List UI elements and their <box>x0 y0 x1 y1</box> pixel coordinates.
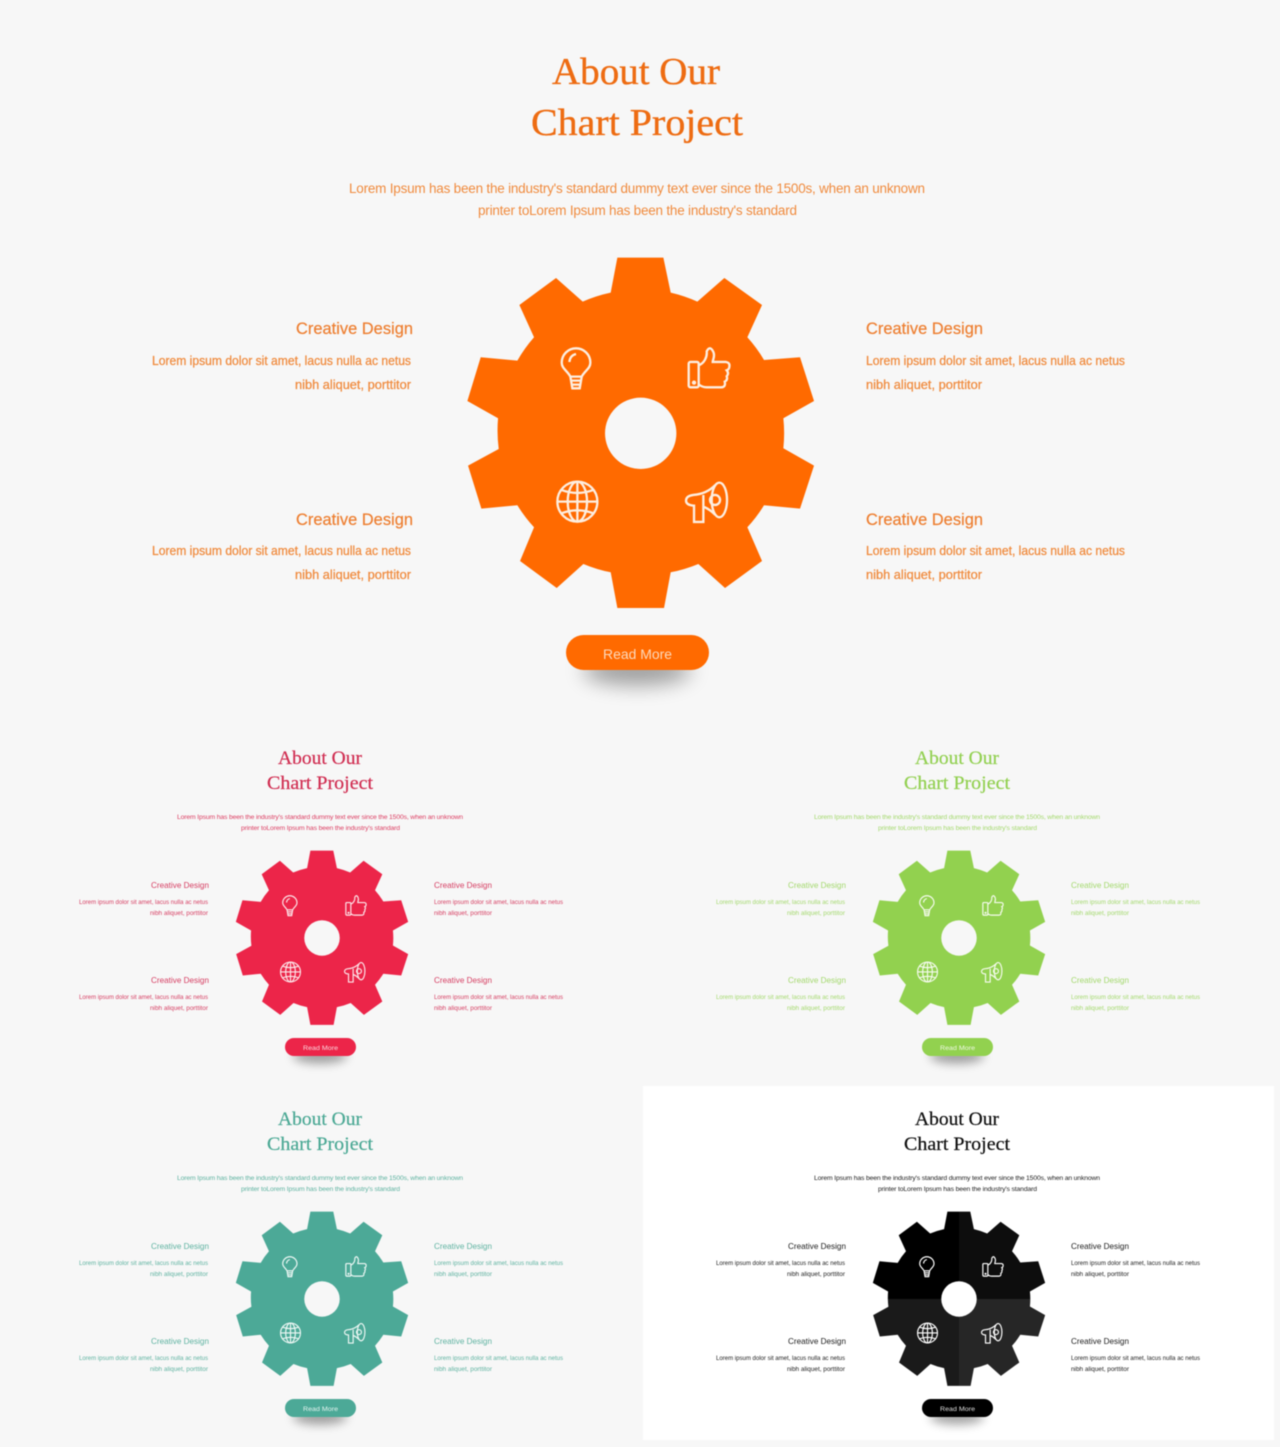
intro text: printer toLorem Ipsum has been the industry's standard <box>241 825 400 832</box>
text block: top right: Lorem ipsum dolor sit amet, lacus nulla ac netus <box>1071 1261 1200 1267</box>
text block: top right: Lorem ipsum dolor sit amet, lacus nulla ac netus <box>434 900 563 906</box>
intro text <box>177 1175 463 1193</box>
text block: top left <box>716 880 846 917</box>
intro text: Lorem Ipsum has been the industry's standard dummy text ever since the 1500s, when an unknown <box>177 1175 463 1182</box>
button: read more: Read More <box>303 1406 338 1413</box>
text block: bottom left: nibh aliquet, porttitor <box>150 1006 208 1012</box>
title <box>904 748 1011 794</box>
gear with icons <box>467 258 814 608</box>
text block: bottom left: Lorem ipsum dolor sit amet, lacus nulla ac netus <box>716 1356 845 1362</box>
text block: bottom right: nibh aliquet, porttitor <box>434 1367 492 1373</box>
text block: top left: nibh aliquet, porttitor <box>150 1272 208 1278</box>
intro text: printer toLorem Ipsum has been the industry's standard <box>878 825 1037 832</box>
text block: top right <box>866 319 1125 392</box>
button: read more: Read More <box>940 1045 975 1052</box>
icon: light bulb <box>920 896 934 916</box>
text block: bottom right: Lorem ipsum dolor sit amet, lacus nulla ac netus <box>866 544 1125 558</box>
icon: megaphone <box>686 483 727 522</box>
text block: top right: Lorem ipsum dolor sit amet, lacus nulla ac netus <box>1071 900 1200 906</box>
text block: bottom right <box>866 510 1125 582</box>
gear with icons <box>236 1212 408 1386</box>
text block: bottom right: nibh aliquet, porttitor <box>1071 1006 1129 1012</box>
text block: bottom right <box>434 1336 563 1373</box>
button: read more: Read More <box>940 1406 975 1413</box>
panel: black chart <box>716 1110 1200 1429</box>
title: About Our <box>552 51 720 93</box>
text block: bottom right: Lorem ipsum dolor sit amet, lacus nulla ac netus <box>434 1356 563 1362</box>
text block: top left: Lorem ipsum dolor sit amet, lacus nulla ac netus <box>79 900 208 906</box>
title: About Our <box>278 748 363 769</box>
text block: top left: nibh aliquet, porttitor <box>787 1272 845 1278</box>
text block: top right: Creative Design <box>1071 880 1129 890</box>
icon: megaphone <box>982 1324 1002 1343</box>
text block: bottom right <box>1071 975 1200 1012</box>
text block: bottom right: Lorem ipsum dolor sit amet, lacus nulla ac netus <box>434 995 563 1001</box>
intro text: Lorem Ipsum has been the industry's standard dummy text ever since the 1500s, when an unknown <box>349 181 925 196</box>
text block: bottom left: Lorem ipsum dolor sit amet, lacus nulla ac netus <box>79 1356 208 1362</box>
text block: bottom left: nibh aliquet, porttitor <box>787 1367 845 1373</box>
text block: top right: nibh aliquet, porttitor <box>434 1272 492 1278</box>
panel: green chart <box>716 748 1200 1064</box>
button: read more <box>566 635 709 685</box>
text block: bottom left <box>152 510 413 582</box>
text block: top right: Creative Design <box>866 319 983 338</box>
text block: top left <box>152 319 413 392</box>
text block: bottom right <box>1071 1336 1200 1373</box>
text block: bottom left: nibh aliquet, porttitor <box>150 1367 208 1373</box>
text block: bottom right: nibh aliquet, porttitor <box>866 568 982 582</box>
text block: top right: nibh aliquet, porttitor <box>434 911 492 917</box>
text block: top left: Lorem ipsum dolor sit amet, lacus nulla ac netus <box>716 900 845 906</box>
intro text: Lorem Ipsum has been the industry's standard dummy text ever since the 1500s, when an unknown <box>814 814 1100 821</box>
text block: top left: Creative Design <box>788 880 846 890</box>
text block: top right: Lorem ipsum dolor sit amet, lacus nulla ac netus <box>434 1261 563 1267</box>
icon: thumbs up <box>689 348 729 387</box>
text block: top right: Creative Design <box>434 1241 492 1251</box>
title: Chart Project <box>904 1134 1011 1155</box>
title <box>904 1109 1011 1155</box>
panel: red chart <box>79 748 563 1064</box>
button: read more <box>922 1399 993 1424</box>
text block: top right: Creative Design <box>434 880 492 890</box>
text block: bottom right <box>434 975 563 1012</box>
text block: top right: nibh aliquet, porttitor <box>1071 1272 1129 1278</box>
icon: globe <box>281 1323 300 1343</box>
icon: light bulb <box>283 1257 297 1277</box>
text block: bottom left: Creative Design <box>151 975 209 985</box>
text block: bottom left: Lorem ipsum dolor sit amet, lacus nulla ac netus <box>716 995 845 1001</box>
text block: bottom left: Lorem ipsum dolor sit amet, lacus nulla ac netus <box>79 995 208 1001</box>
icon: megaphone <box>345 1324 365 1343</box>
text block: bottom left <box>79 1336 209 1373</box>
text block: bottom left: Creative Design <box>151 1336 209 1346</box>
text block: top left: Lorem ipsum dolor sit amet, lacus nulla ac netus <box>152 354 411 368</box>
text block: top right: Lorem ipsum dolor sit amet, lacus nulla ac netus <box>866 354 1125 368</box>
button: read more: Read More <box>603 646 672 662</box>
text block: bottom right: Creative Design <box>866 510 983 529</box>
panel: teal chart <box>79 1109 563 1424</box>
text block: bottom right: Creative Design <box>1071 1336 1129 1346</box>
intro text <box>814 1175 1100 1193</box>
icon: light bulb <box>283 896 297 916</box>
title: Chart Project <box>531 102 743 144</box>
text block: bottom left: nibh aliquet, porttitor <box>787 1006 845 1012</box>
text block: top right <box>434 880 563 917</box>
button: read more <box>285 1038 356 1064</box>
text block: top right: nibh aliquet, porttitor <box>866 378 982 392</box>
text block: bottom left <box>716 1336 846 1373</box>
button: read more <box>922 1038 993 1064</box>
text block: bottom right: nibh aliquet, porttitor <box>434 1006 492 1012</box>
intro text: printer toLorem Ipsum has been the industry's standard <box>878 1186 1037 1193</box>
text block: bottom right: Creative Design <box>434 1336 492 1346</box>
text block: top right <box>434 1241 563 1278</box>
icon: light bulb <box>920 1257 934 1277</box>
intro text: printer toLorem Ipsum has been the industry's standard <box>241 1186 400 1193</box>
title: Chart Project <box>267 773 374 794</box>
icon: light bulb <box>562 348 590 388</box>
gear with icons <box>873 851 1045 1025</box>
text block: top left: Creative Design <box>151 1241 209 1251</box>
text block: top left: nibh aliquet, porttitor <box>295 378 411 392</box>
icon: thumbs up <box>983 896 1003 915</box>
text block: top left: Lorem ipsum dolor sit amet, lacus nulla ac netus <box>79 1261 208 1267</box>
text block: bottom left <box>716 975 846 1012</box>
icon: globe <box>918 1323 937 1343</box>
icon: globe <box>557 482 597 522</box>
text block: bottom left: Creative Design <box>788 1336 846 1346</box>
text block: top right <box>1071 1241 1200 1278</box>
text block: bottom left: Creative Design <box>788 975 846 985</box>
text block: bottom right: Lorem ipsum dolor sit amet, lacus nulla ac netus <box>1071 1356 1200 1362</box>
title: Chart Project <box>904 773 1011 794</box>
text block: bottom right: Creative Design <box>434 975 492 985</box>
button: read more <box>285 1399 356 1424</box>
intro text: printer toLorem Ipsum has been the industry's standard <box>478 203 797 218</box>
gear with icons <box>873 1212 1045 1386</box>
intro text <box>177 814 463 832</box>
intro text <box>814 814 1100 832</box>
text block: bottom right: Lorem ipsum dolor sit amet, lacus nulla ac netus <box>1071 995 1200 1001</box>
text block: top left <box>716 1241 846 1278</box>
title <box>267 748 374 794</box>
text block: top left <box>79 880 209 917</box>
title: About Our <box>915 748 1000 769</box>
panel: main orange chart <box>152 51 1125 685</box>
intro text: Lorem Ipsum has been the industry's standard dummy text ever since the 1500s, when an unknown <box>814 1175 1100 1182</box>
text block: top left: Lorem ipsum dolor sit amet, lacus nulla ac netus <box>716 1261 845 1267</box>
text block: top left <box>79 1241 209 1278</box>
title: Chart Project <box>267 1134 374 1155</box>
icon: thumbs up <box>983 1257 1003 1276</box>
button: read more: Read More <box>303 1045 338 1052</box>
intro text <box>349 181 925 218</box>
text block: top right <box>1071 880 1200 917</box>
text block: top left: Creative Design <box>151 880 209 890</box>
text block: top left: nibh aliquet, porttitor <box>150 911 208 917</box>
text block: bottom left: nibh aliquet, porttitor <box>295 568 411 582</box>
text block: top left: Creative Design <box>788 1241 846 1251</box>
intro text: Lorem Ipsum has been the industry's standard dummy text ever since the 1500s, when an unknown <box>177 814 463 821</box>
icon: megaphone <box>982 963 1002 982</box>
icon: thumbs up <box>346 896 366 915</box>
text block: top right: nibh aliquet, porttitor <box>1071 911 1129 917</box>
text block: top left: nibh aliquet, porttitor <box>787 911 845 917</box>
text block: bottom left <box>79 975 209 1012</box>
title <box>267 1109 374 1155</box>
title: About Our <box>278 1109 363 1130</box>
text block: bottom right: Creative Design <box>1071 975 1129 985</box>
title <box>531 51 743 144</box>
text block: bottom left: Creative Design <box>296 510 413 529</box>
text block: bottom left: Lorem ipsum dolor sit amet, lacus nulla ac netus <box>152 544 411 558</box>
gear with icons <box>236 851 408 1025</box>
title: About Our <box>915 1109 1000 1130</box>
text block: top right: Creative Design <box>1071 1241 1129 1251</box>
icon: globe <box>281 962 300 982</box>
icon: thumbs up <box>346 1257 366 1276</box>
text block: bottom right: nibh aliquet, porttitor <box>1071 1367 1129 1373</box>
text block: top left: Creative Design <box>296 319 413 338</box>
icon: megaphone <box>345 963 365 982</box>
icon: globe <box>918 962 937 982</box>
